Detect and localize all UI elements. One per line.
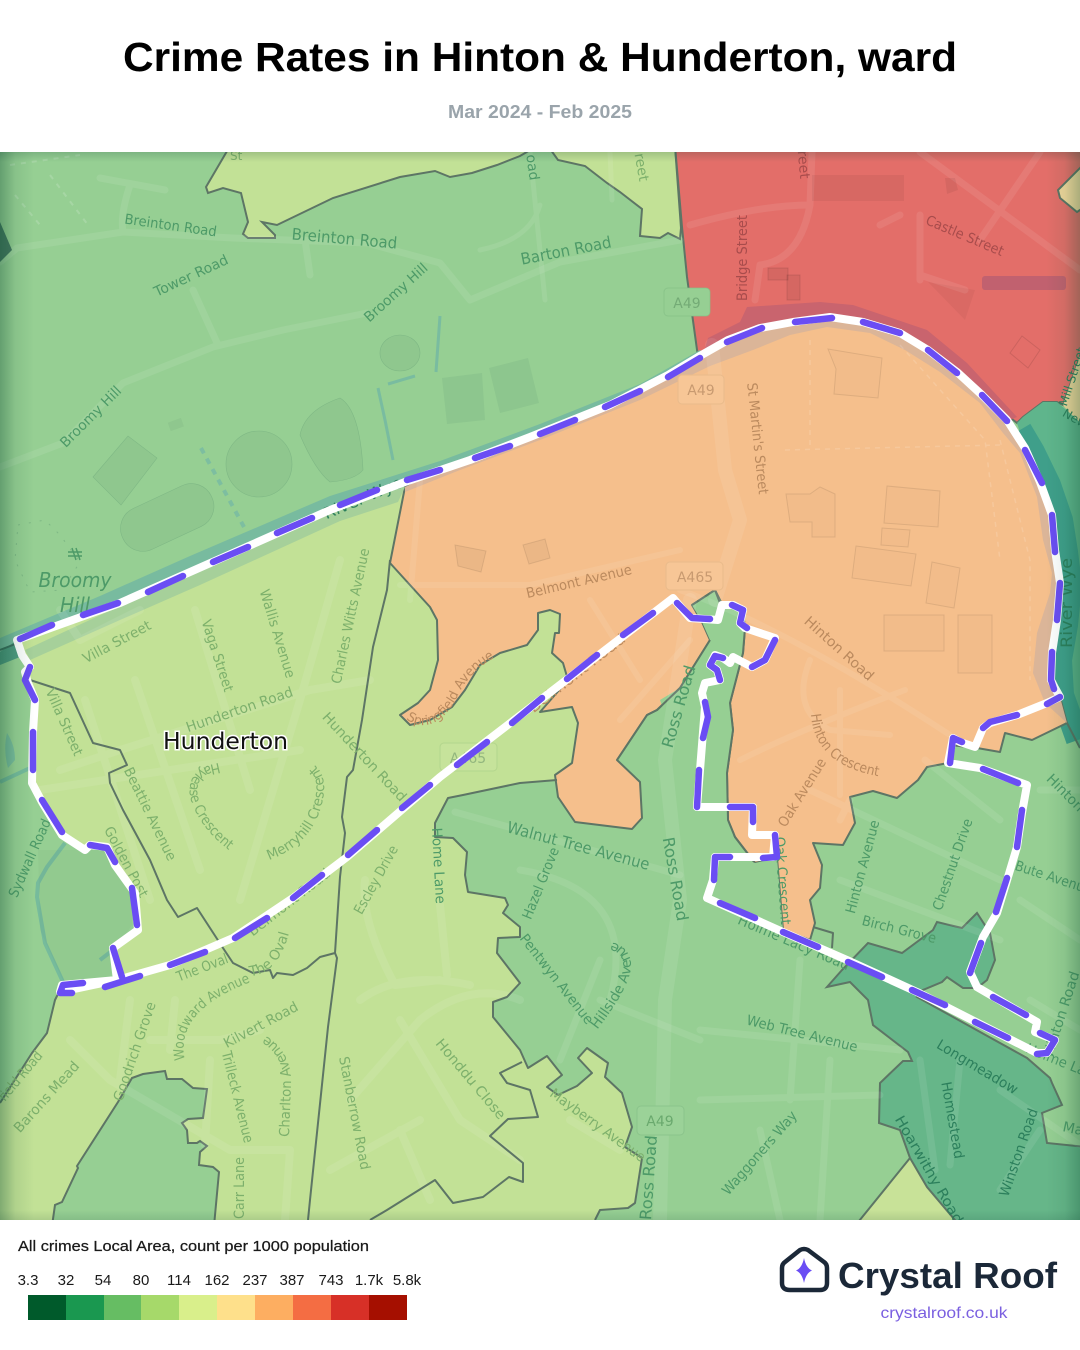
area: dark green east riverbank: [1017, 402, 1080, 748]
labels: hunderton streets: The Oval: [248, 932, 288, 976]
icon: house with star: [782, 1249, 827, 1290]
legend value labels: 5.8k: [393, 1272, 422, 1289]
purple dashes: [20, 318, 1060, 1054]
labels: north west: River Wye: [320, 473, 405, 523]
legend value labels: [18, 1272, 422, 1289]
labels: south east: Homestead: [937, 1081, 967, 1160]
area: tan east: [1063, 355, 1080, 425]
labels: hunderton streets: The Oval: [174, 951, 231, 986]
labels: south east: [735, 558, 1080, 1227]
labels: north west: St: [230, 149, 243, 163]
legend title: All crimes Local Area, count per 1000 population: [18, 1238, 369, 1255]
labels: walnut tree estate: Ross Road: [636, 1135, 661, 1221]
badge: A49 north: A49: [673, 296, 701, 312]
labels: city centre: Belmont Avenue: [525, 562, 634, 602]
legend value labels: 32: [58, 1272, 74, 1289]
labels: walnut tree estate: Ross Road: [659, 836, 692, 923]
area: tan top right: [1058, 162, 1080, 212]
badge: A49 centre: A49: [687, 383, 715, 399]
labels: north west: [38, 149, 651, 617]
labels: hunderton streets: Hunderton Road: [319, 709, 409, 805]
river: tan band on orange side: [405, 317, 1067, 723]
labels: hunderton streets: Charles Witts Avenue: [329, 547, 373, 685]
boundary lines between areas: [0, 222, 1080, 1220]
brand logo: [782, 1249, 1058, 1322]
labels: hunderton streets: Villa Street: [42, 686, 86, 759]
labels: hunderton streets: Sydwall Road: [6, 817, 55, 900]
labels: hunderton streets: Vaga Street: [198, 618, 236, 694]
labels: north west: Barton Road: [519, 232, 613, 269]
map edge vignette: [0, 152, 1080, 1220]
badge: A465 west: [440, 743, 497, 771]
area: green lower ward pocket: [753, 860, 783, 928]
area: red castle quarter: [675, 146, 1080, 423]
labels: hunderton streets: Haylease Crescent: [190, 763, 234, 850]
labels: hunderton streets: Hunderton Road: [184, 684, 295, 736]
labels: city centre: Hinton Crescent: [811, 714, 880, 776]
labels: north west: Breinton Road: [291, 224, 398, 253]
labels: south east: Chestnut Drive: [930, 817, 976, 913]
labels: city centre: Belmont Road: [526, 631, 629, 716]
ward boundary: white line with purple dashes: [17, 317, 1060, 1054]
badge: A49 south: [637, 1106, 684, 1135]
labels: city centre: Springfield Avenue: [407, 652, 494, 726]
labels: walnut tree estate: [464, 634, 857, 1219]
labels: south west: Carr Lane: [232, 1157, 248, 1219]
area: green strip inside ward: [660, 590, 745, 837]
labels: south west: Woodward Avenue: [173, 976, 250, 1061]
legend value labels: 54: [95, 1272, 111, 1289]
labels: hunderton streets: Escley Drive: [351, 843, 402, 917]
area: lime south west: [0, 487, 642, 1220]
labels: city centre: Oak Crescent: [771, 836, 793, 926]
labels: walnut tree estate: Ross Road: [658, 663, 700, 750]
labels: city centre: Castle Street: [923, 213, 1006, 260]
legend value labels: 237: [242, 1272, 268, 1289]
badge: A465 west: A465: [450, 751, 486, 767]
labels: city centre: Oak Avenue: [775, 756, 830, 830]
area: darker green south east: [827, 913, 1080, 1226]
green strip outline: [617, 590, 755, 863]
title: Crime Rates in Hinton & Hunderton, ward: [123, 34, 957, 80]
legend: [18, 1238, 422, 1320]
fields and buildings: [0, 155, 1030, 985]
legend colour scale: [28, 1295, 407, 1320]
subtitle: date range: Mar 2024 - Feb 2025: [448, 102, 632, 122]
labels: south west: Mayberry Avenue: [547, 1086, 648, 1166]
labels: south west: Barons Mead: [11, 1059, 83, 1136]
labels: north west: Hill: [60, 593, 90, 617]
labels: walnut tree estate: Pentwyn Avenue: [516, 931, 596, 1028]
legend value labels: 743: [318, 1272, 344, 1289]
legend value labels: 80: [133, 1272, 149, 1289]
badge: A49 south: A49: [646, 1114, 674, 1130]
river: north west band: [0, 350, 704, 665]
labels: north west: Breinton Road: [123, 212, 218, 240]
legend value labels: 114: [167, 1272, 191, 1289]
labels: north west: Tower Road: [151, 252, 231, 301]
labels: south west: [0, 976, 644, 1218]
badge: A49 centre: [678, 375, 724, 404]
legend value labels: 3.3: [18, 1272, 38, 1289]
legend value labels: 387: [279, 1272, 305, 1289]
badge: A465 east: [666, 562, 723, 590]
labels: hunderton streets: Beattie Avenue: [120, 765, 179, 864]
red zone details: [690, 152, 1080, 421]
labels: south east: Hoarwithy Road: [891, 1113, 966, 1227]
area: base green: [0, 152, 1080, 1220]
labels: north west: Broomy Hill: [57, 383, 125, 451]
labels: hunderton streets: Belmont Road: [245, 866, 334, 940]
area: lime north: [206, 146, 681, 239]
area: lime south east pocket: [858, 1158, 952, 1220]
labels: hunderton streets: Home Lane: [428, 827, 448, 904]
labels: city centre: Bridge Street: [735, 215, 751, 301]
place label: Hunderton: Hunderton: [163, 729, 288, 755]
labels: south west: Stanberrow Road: [335, 1055, 373, 1171]
labels: south west: Kilvert Road: [221, 999, 301, 1052]
river wye east band: [1020, 430, 1078, 740]
labels: hunderton streets: Merryhill Crescent: [266, 766, 324, 860]
legend value labels: 162: [204, 1272, 230, 1289]
labels: south west: Charlton Avenue: [263, 1036, 291, 1136]
labels: city centre: [407, 152, 1080, 924]
labels: south west: Trilleck Avenue: [218, 1049, 256, 1145]
labels: hunderton streets: Golden Post: [100, 824, 151, 901]
labels: city centre: Hinton Road: [801, 614, 877, 684]
labels: city centre: St Martin's Street: [743, 382, 771, 496]
area: orange ward core: [390, 317, 1067, 940]
labels: north west: Broomy Hill: [361, 260, 431, 326]
labels: south east: Holme Lacy Road: [735, 913, 852, 974]
streets: [0, 152, 1080, 1220]
labels: south east: Birch Grove: [860, 913, 938, 947]
badge: A49 north: [664, 288, 710, 316]
badge: A465 east: A465: [677, 570, 713, 586]
road name labels: [0, 152, 1080, 1220]
white outline: [17, 317, 1060, 1053]
labels: south west: Honddu Close: [432, 1036, 508, 1123]
brand name: Crystal Roof: [838, 1255, 1058, 1296]
labels: south east: Longmeadow: [934, 1037, 1021, 1098]
area: green south west: [52, 1071, 219, 1226]
labels: hunderton streets: Wallis Avenue: [256, 588, 298, 680]
labels: north west: Broomy: [38, 568, 113, 592]
labels: walnut tree estate: Web Tree Avenue: [745, 1013, 859, 1056]
labels: walnut tree estate: Hazel Grove: [520, 845, 563, 922]
labels: walnut tree estate: Waggoners Way: [719, 1108, 801, 1199]
legend value labels: 1.7k: [355, 1272, 384, 1289]
labels: walnut tree estate: Walnut Tree Avenue: [505, 817, 652, 874]
labels: south west: Goodrich Grove: [111, 1000, 160, 1103]
road badges: [440, 288, 724, 1135]
labels: walnut tree estate: Hillside Avenue: [590, 942, 631, 1028]
labels: hunderton streets: Villa Street: [80, 618, 154, 667]
labels: south east: Hinton Avenue: [843, 819, 883, 915]
labels: south east: River Wye: [1057, 558, 1076, 648]
labels: north west: reet: [631, 152, 651, 183]
labels: city centre: reet: [794, 150, 812, 180]
labels: north west: oad: [522, 153, 542, 181]
labels: south east: Winston Road: [997, 1107, 1042, 1199]
brand url: crystalroof.co.uk: [880, 1305, 1009, 1322]
labels: hunderton streets: [8, 549, 445, 980]
